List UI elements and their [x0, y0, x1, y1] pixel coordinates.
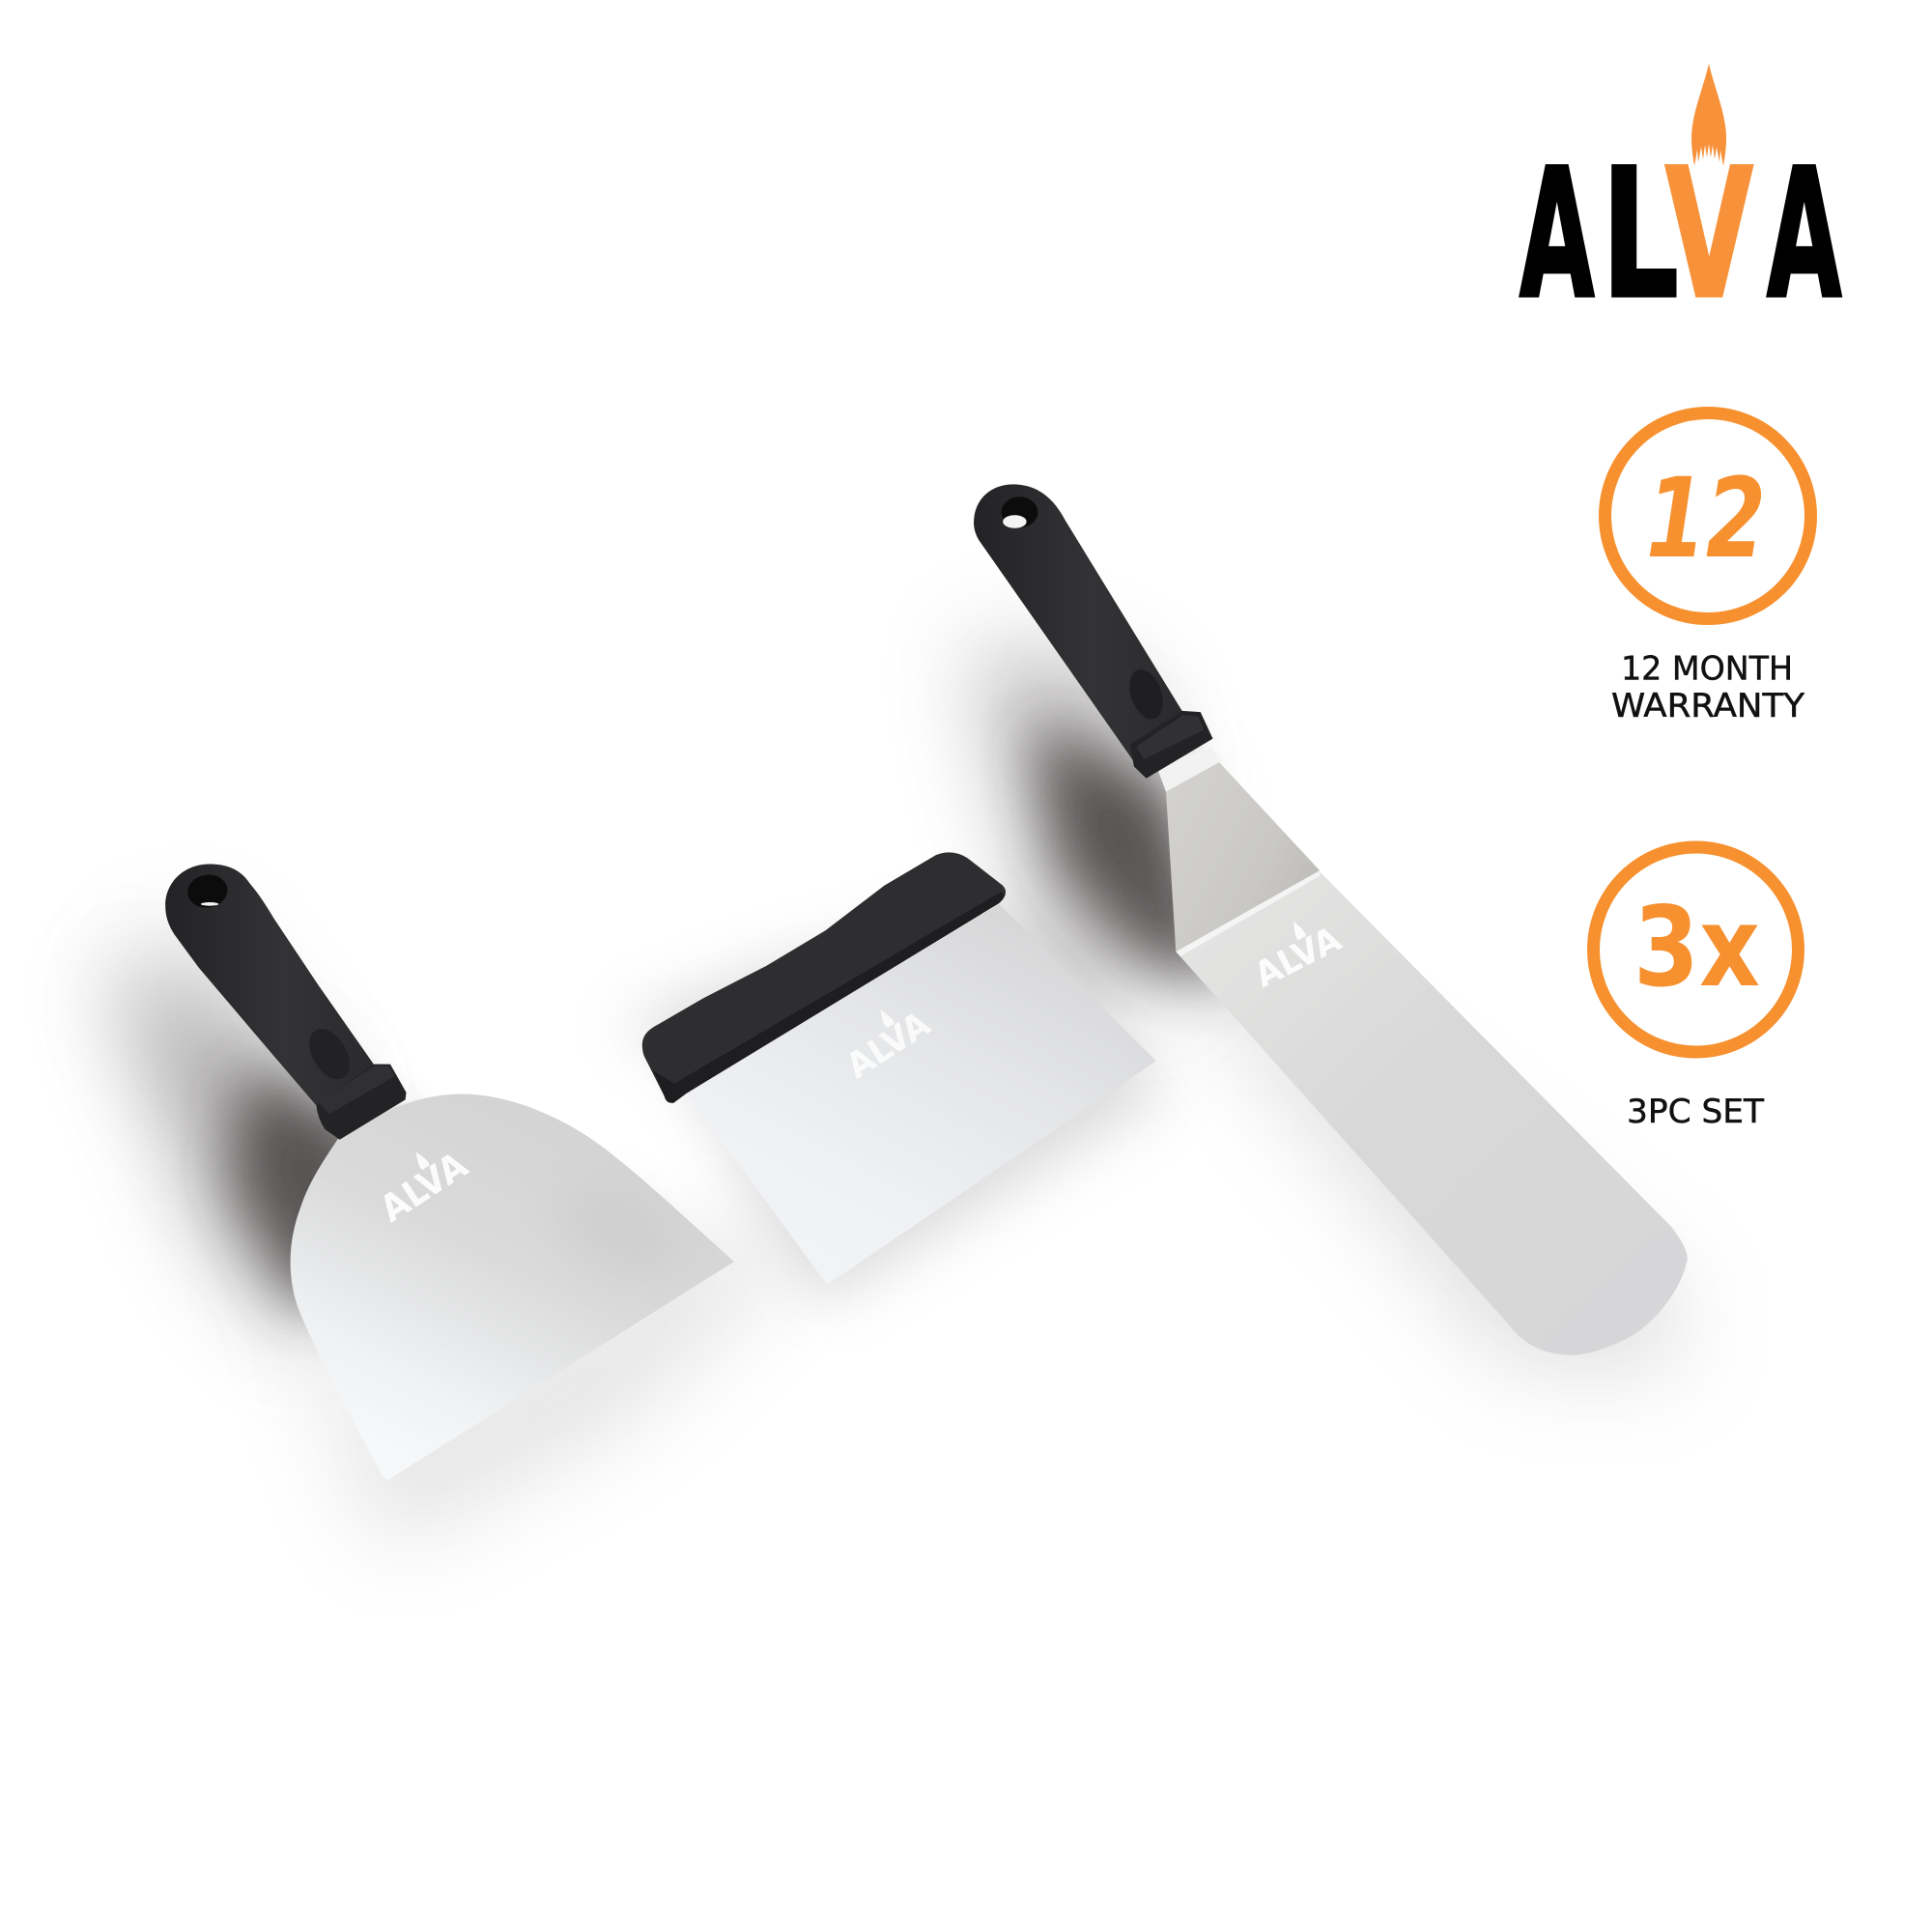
logo wordmark: L — [1602, 131, 1679, 338]
left spatula handle — [165, 865, 407, 1140]
warranty caption: 12 MONTH — [1621, 649, 1793, 688]
scraper blade — [687, 904, 1156, 1285]
set count ring — [1594, 847, 1799, 1052]
logo wordmark: V — [1665, 132, 1753, 338]
long handle — [974, 484, 1213, 779]
warranty badge — [1605, 413, 1810, 725]
set count caption: 3PC SET — [1627, 1093, 1764, 1131]
left spatula blade — [291, 1094, 734, 1479]
middle scraper — [642, 852, 1156, 1285]
warranty caption — [1611, 649, 1804, 725]
left spatula — [165, 865, 734, 1479]
blade logo long: ALVA — [1248, 920, 1348, 996]
scraper handle — [642, 852, 1006, 1103]
drop shadows — [106, 618, 1681, 1546]
logo wordmark — [1520, 131, 1841, 338]
logo flame — [1691, 64, 1726, 166]
warranty number: 12 — [1646, 454, 1766, 582]
set count badge — [1594, 847, 1799, 1131]
blade logo left: ALVA — [372, 1143, 475, 1231]
warranty ring — [1605, 413, 1810, 618]
long blade — [1156, 748, 1688, 1355]
blade logo middle: ALVA — [839, 1004, 938, 1087]
logo wordmark: A — [1767, 131, 1841, 337]
long turner spatula — [974, 484, 1688, 1355]
logo wordmark: A — [1520, 131, 1594, 337]
warranty caption: WARRANTY — [1611, 687, 1804, 725]
set count number: 3x — [1634, 883, 1760, 1011]
brand logo — [1520, 64, 1841, 338]
